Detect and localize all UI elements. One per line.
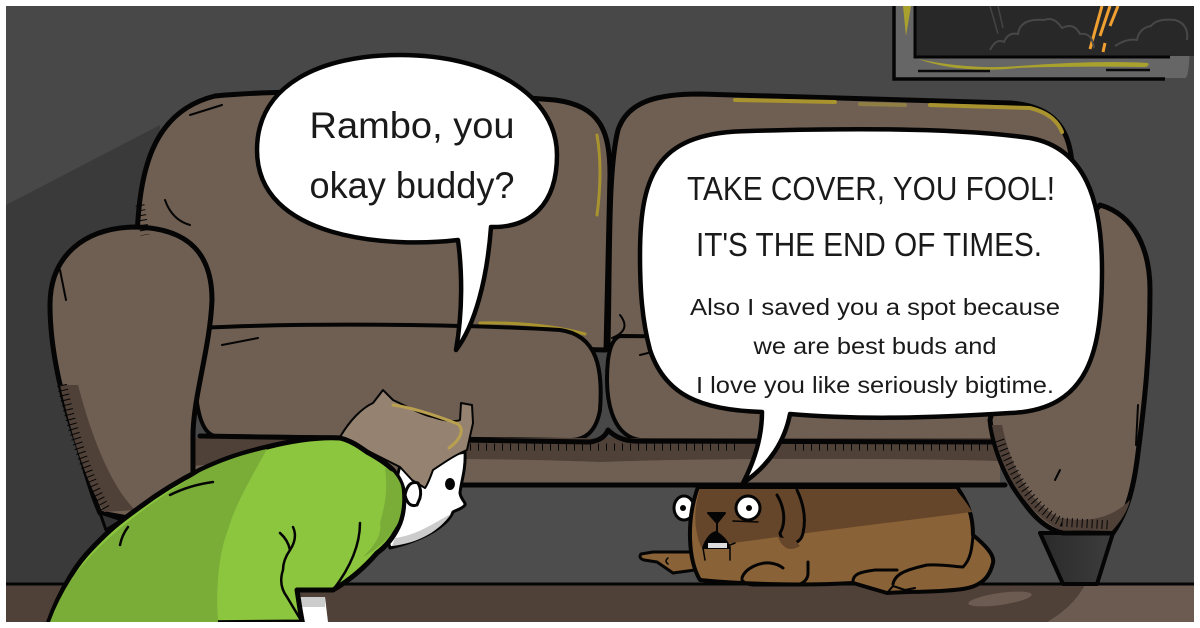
- bubble text: [687, 170, 1060, 398]
- couch: right arm: [990, 205, 1150, 533]
- bubble text: IT'S THE END OF TIMES.: [696, 226, 1042, 263]
- couch: yellow highlights: [480, 100, 1140, 334]
- man: green shirt: [48, 438, 404, 624]
- dog: front leg: [742, 562, 808, 585]
- man: shirt crease marks: [120, 482, 360, 622]
- bubble text: TAKE COVER, YOU FOOL!: [687, 170, 1055, 207]
- dog: [640, 487, 993, 593]
- dog: right eye: [736, 496, 760, 520]
- couch: left leg: [100, 513, 122, 530]
- man: [48, 390, 473, 624]
- couch: left seat cushion: [195, 325, 601, 440]
- couch: [50, 92, 1150, 584]
- bubble text: Also I saved you a spot because: [690, 294, 1060, 320]
- dog: pointing paw: [640, 552, 695, 573]
- couch: right seat cushion: [607, 336, 1010, 442]
- couch: leg: [1040, 533, 1113, 584]
- dog: nose and mouth: [703, 513, 730, 548]
- couch: crease marks: [60, 105, 660, 355]
- man: eye: [445, 478, 455, 490]
- bubble text: Rambo, you: [310, 105, 514, 146]
- couch: base: [196, 458, 1000, 482]
- man: face: [385, 452, 465, 548]
- speech bubble: Rambo question: [257, 55, 557, 350]
- bubble text: I love you like seriously bigtime.: [696, 372, 1054, 398]
- man: arm: [300, 597, 328, 622]
- man: hair: [340, 390, 473, 488]
- picture frame: [893, 6, 1194, 79]
- couch: back right cushion: [608, 94, 1100, 350]
- man: ear: [405, 482, 421, 506]
- bubble text: we are best buds and: [752, 333, 996, 359]
- dog: ear: [777, 490, 804, 543]
- bubble text: [310, 105, 514, 206]
- speech bubble: dog reply: [640, 129, 1102, 483]
- couch: back left cushion: [137, 92, 610, 350]
- couch: left arm shadow: [60, 385, 135, 512]
- bubble text: okay buddy?: [310, 165, 514, 206]
- dog: body: [690, 487, 993, 593]
- floor: [6, 584, 1194, 622]
- dog: back leg: [853, 570, 897, 583]
- couch: left arm: [50, 227, 212, 520]
- dog: left eye: [674, 496, 694, 520]
